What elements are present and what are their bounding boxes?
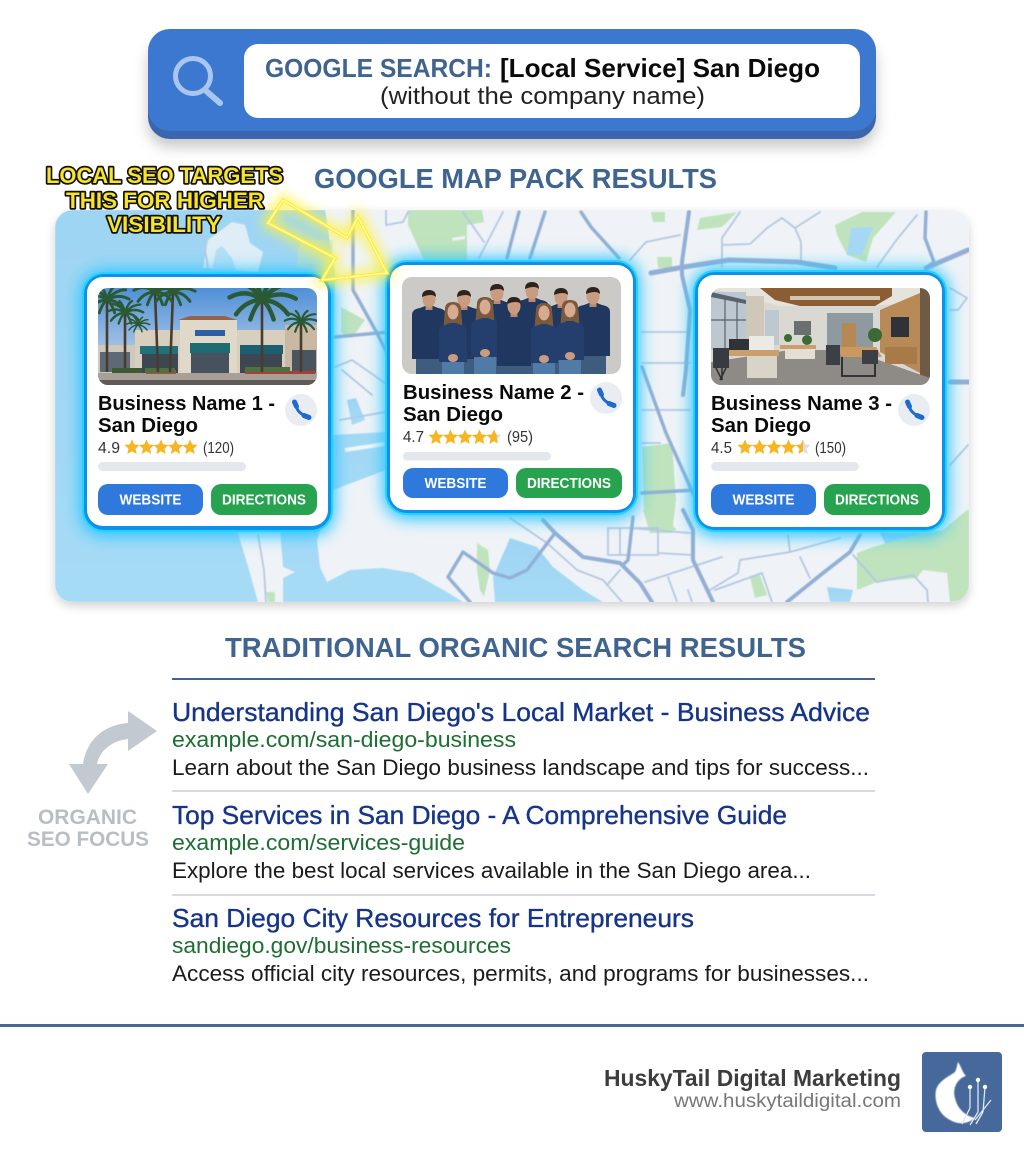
- button: website: WEBSITE: [424, 476, 487, 492]
- map roads: [203, 210, 968, 602]
- rating: [98, 439, 234, 457]
- rating: [403, 429, 533, 446]
- callout text: [46, 163, 283, 237]
- rating: (95): [507, 429, 533, 446]
- button: directions: [516, 468, 622, 498]
- icon: phone: [285, 394, 317, 426]
- business name 3: San Diego: [711, 415, 811, 437]
- callout text: VISIBILITY: [107, 212, 221, 237]
- organic result 3: San Diego City Resources for Entrepreneurs: [172, 903, 694, 933]
- rating: (150): [815, 440, 846, 457]
- button: directions: [824, 484, 930, 515]
- icon: magnifying glass: [176, 58, 220, 103]
- organic result 1: Learn about the San Diego business landscape and tips for success...: [172, 755, 869, 780]
- footer brand text: www.huskytaildigital.com: [673, 1091, 901, 1112]
- business name 1: San Diego: [98, 415, 198, 437]
- placeholder bar: [98, 462, 246, 471]
- map parks: [266, 210, 969, 602]
- business name 2: San Diego: [403, 404, 503, 426]
- icon: phone: [590, 382, 622, 414]
- heading: map pack: GOOGLE MAP PACK RESULTS: [314, 163, 717, 194]
- icon: curved organic arrow: [69, 711, 157, 794]
- heading: organic results: TRADITIONAL ORGANIC SEARCH RESULTS: [225, 632, 806, 663]
- organic result 3: Access official city resources, permits, and programs for businesses...: [172, 961, 869, 986]
- button: website: [711, 484, 816, 515]
- organic result 2: Top Services in San Diego - A Comprehensive Guide: [172, 800, 787, 830]
- organic result 2: Explore the best local services available in the San Diego area...: [172, 858, 811, 883]
- photo: team: [402, 277, 621, 374]
- search query text: (without the company name): [380, 83, 705, 110]
- button: directions: [211, 484, 317, 515]
- rating: 4.5: [711, 440, 732, 457]
- search bar: [148, 29, 876, 139]
- organic result 3: sandiego.gov/business-resources: [172, 933, 511, 958]
- organic result 1: Understanding San Diego's Local Market - Business Advice: [172, 697, 870, 727]
- callout text: LOCAL SEO TARGETS: [46, 163, 283, 188]
- organic result 3: [172, 903, 869, 986]
- business name 1: [98, 393, 275, 437]
- organic result 2: example.com/services-guide: [172, 830, 465, 855]
- label: organic seo focus: SEO FOCUS: [27, 828, 149, 851]
- rating: [711, 439, 846, 457]
- panel: business card 3: [691, 268, 949, 536]
- rating: 4.9: [98, 440, 120, 457]
- button: website: WEBSITE: [732, 492, 795, 508]
- organic result 2: [172, 800, 811, 883]
- icon: phone: [898, 394, 930, 426]
- footer brand text: HuskyTail Digital Marketing: [604, 1065, 901, 1091]
- placeholder bar: [403, 452, 551, 460]
- label: organic seo focus: [27, 806, 149, 851]
- business name 1: Business Name 1 -: [98, 393, 275, 415]
- business name 2: Business Name 2 -: [403, 382, 584, 404]
- map land: west peninsula: [203, 222, 295, 602]
- callout arrow: neon yellow: [268, 200, 387, 280]
- label: organic seo focus: ORGANIC: [38, 806, 137, 829]
- placeholder bar: [711, 462, 859, 471]
- search query text: [265, 53, 820, 110]
- photo: office: [711, 288, 930, 385]
- organic result 1: [172, 697, 870, 780]
- search query text: [Local Service] San Diego: [500, 53, 820, 83]
- panel: business card 2: [383, 258, 640, 519]
- footer brand text: [604, 1065, 901, 1112]
- button: directions: DIRECTIONS: [835, 492, 919, 508]
- rating: 4.7: [403, 429, 424, 446]
- photo: storefront: [98, 288, 317, 385]
- footer logo: [922, 1052, 1002, 1132]
- business name 3: [711, 393, 892, 437]
- organic result 1: example.com/san-diego-business: [172, 727, 516, 752]
- panel: business card 1: [80, 270, 335, 536]
- button: directions: DIRECTIONS: [527, 476, 611, 492]
- button: directions: DIRECTIONS: [222, 492, 306, 508]
- button: website: [98, 484, 203, 515]
- callout text: THIS FOR HIGHER: [66, 188, 264, 213]
- map water: [55, 210, 932, 602]
- map panel: [55, 210, 969, 602]
- button: website: [403, 468, 508, 498]
- search input box: [244, 44, 860, 118]
- search query text: GOOGLE SEARCH:: [265, 53, 492, 83]
- business name 3: Business Name 3 -: [711, 393, 892, 415]
- business name 2: [403, 382, 584, 426]
- rating: (120): [203, 440, 234, 457]
- button: website: WEBSITE: [120, 492, 182, 508]
